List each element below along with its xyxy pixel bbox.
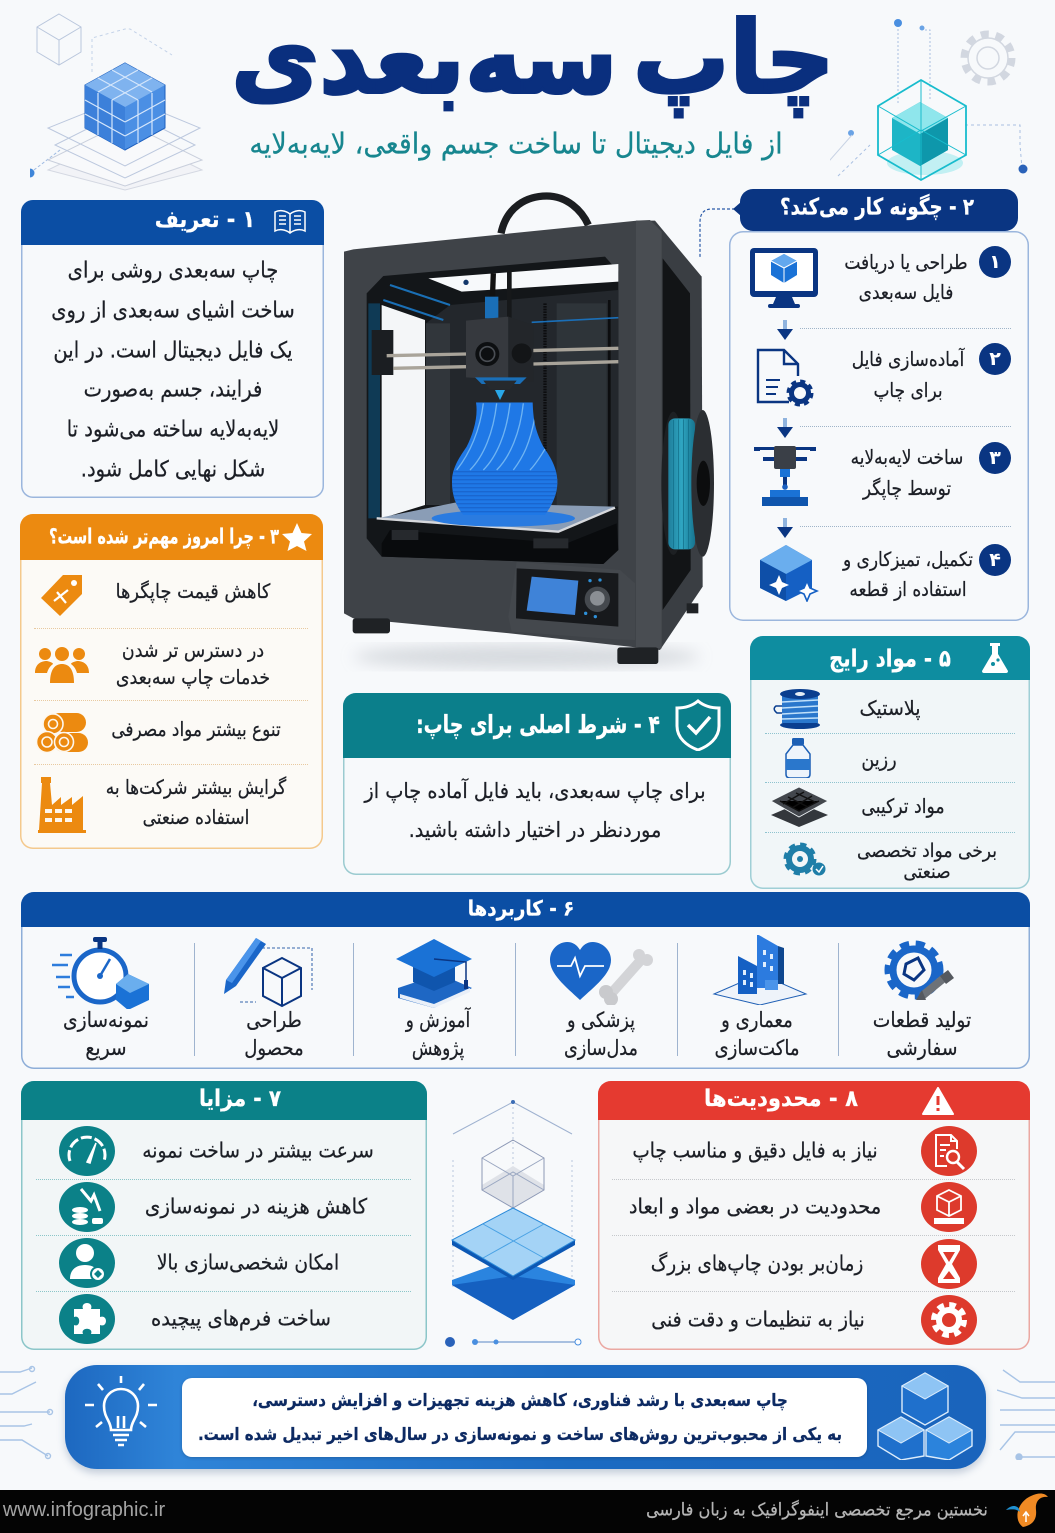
item: custom parts [873,1008,971,1060]
icon: size limit [921,1182,977,1232]
step 4 text [842,548,973,602]
panel 7: advantages [21,1081,427,1350]
heading: why: ۳ - چرا امروز مهم‌تر شده است؟ [49,524,279,548]
icon: gear and part [784,842,826,876]
panel 7 header [21,1081,427,1120]
divider [612,1291,1015,1292]
circuit lines: left [0,1364,56,1460]
3D printer illustration [344,192,714,672]
item 2: خدمات چاپ سه‌بعدی [116,666,270,689]
connector: dashed line to how it works [699,208,734,257]
step 4 text: استفاده از قطعه [849,578,967,601]
item 2: در دسترس تر شدن [122,639,264,662]
wire cube [37,14,81,65]
printed blue vase [450,400,560,517]
icon: star [282,523,312,551]
heading: how it works: ۲ - چگونه کار می‌کند؟ [780,194,974,220]
panel 5 header [750,636,1030,680]
item: specialty [857,840,997,883]
item: medicine: مدل‌سازی [564,1036,638,1060]
lower blue layer [452,1258,575,1320]
item: architecture [714,1008,800,1060]
icon: puzzle [59,1294,115,1344]
item 3: تنوع بیشتر مواد مصرفی [111,718,281,741]
heading: advantages: ۷ - مزایا [199,1086,281,1112]
condition text: موردنظر در اختیار داشته باشید. [409,818,661,842]
step 1 text: طراحی یا دریافت [844,251,968,274]
logo [1004,1491,1050,1529]
icon: architecture [712,935,808,1005]
conclusion text: به یکی از محبوب‌ترین روش‌های ساخت و نمونه‌سازی در سال‌های اخیر تبدیل شده است. [198,1425,842,1445]
divider [612,1235,1015,1236]
item 4 [106,776,286,829]
divider [765,782,1015,783]
panel 8: limitations [598,1081,1030,1350]
icon: warning [922,1087,954,1115]
step 1 text: فایل سه‌بعدی [859,281,953,304]
icon: shield [676,699,720,751]
icon: nozzle printing [754,446,816,506]
icon: book [274,210,306,234]
icon: hourglass [921,1239,977,1289]
item: specialty: صنعتی [903,861,951,883]
icon: pencil and cube [222,938,318,1010]
build plate [382,523,618,564]
bottom dots [445,1337,581,1347]
arrow 2 [777,418,793,438]
icon: personalization [59,1238,115,1288]
panel 1: definition [21,200,324,498]
item: medicine [564,1008,638,1060]
step 2 badge: ۲ [989,348,1001,370]
item 2 [116,639,270,689]
step 1 badge [979,246,1011,278]
step 3 text: ساخت لایه‌به‌لایه [851,446,963,469]
heading: definition: ۱ - تعریف [155,207,255,233]
icon: light bulb [83,1375,159,1453]
step 2 text [852,348,965,402]
item: medicine: پزشکی و [567,1008,635,1032]
item: complex forms: ساخت فرم‌های پیچیده [151,1306,331,1330]
definition text: لایه‌به‌لایه ساخته می‌شود تا [67,417,279,443]
conclusion banner [65,1365,986,1469]
divider [800,526,1011,527]
footer tagline: نخستین مرجع تخصصی اینفوگرافیک به زبان فارسی [646,1500,988,1520]
conclusion text [198,1384,842,1452]
item: product design: طراحی [246,1008,302,1032]
icon: cost reduction [59,1182,115,1232]
item: rapid prototyping: نمونه‌سازی [63,1008,149,1032]
gear [964,34,1012,82]
icon: composite layers [771,788,828,827]
item 4: استفاده صنعتی [143,806,249,829]
blue lattice cube [85,63,165,150]
icon: custom parts gear [884,940,954,1000]
icon: factory [38,777,86,833]
panel 5: common materials [750,636,1030,889]
icon: finished cube [760,545,819,602]
divider [36,1179,411,1180]
definition text: شکل نهایی کامل شود. [81,457,265,483]
item: rapid prototyping: سریع [85,1036,127,1060]
item 1: کاهش قیمت چاپگرها [116,580,270,603]
step 2 badge [979,343,1011,375]
item: resin: رزین [861,747,897,771]
item: product design [244,1006,304,1062]
panel 3 header [20,514,323,560]
icon: monitor [750,248,818,308]
heading: materials: ۵ - مواد رایج [829,645,951,673]
item 4: گرایش بیشتر شرکت‌ها به [106,776,286,799]
step 1 text [844,251,968,304]
item: accurate file: نیاز به فایل دقیق و مناسب چاپ [632,1138,878,1162]
divider [34,764,308,765]
definition text: فرایند، جسم به‌صورت [84,377,262,403]
item: composites: مواد ترکیبی [861,794,945,818]
wire cube [482,1140,544,1208]
title: چاپ سه‌بعدی [231,0,835,116]
step 2 text: آماده‌سازی فایل [852,348,964,371]
item: education: پژوهش [412,1036,464,1060]
conclusion text: چاپ سه‌بعدی با رشد فناوری، کاهش هزینه تجهیزات و افزایش دسترسی، [252,1391,788,1411]
item: materials limit: محدودیت در بعضی مواد و ابعاد [629,1194,881,1218]
conclusion text card [182,1378,867,1457]
extruder [466,270,533,400]
panel 2 header [740,189,1018,231]
definition text: ساخت اشیای سه‌بعدی از روی [51,297,295,323]
panel 6: applications [21,892,1030,1069]
heading: limitations: ۸ - محدودیت‌ها [704,1086,858,1112]
item: cost: کاهش هزینه در نمونه‌سازی [145,1194,367,1218]
panel 6 header [21,892,1030,927]
divider [34,628,308,629]
item: technical settings: نیاز به تنظیمات و دقت فنی [651,1307,865,1331]
teal cube [878,80,966,180]
panel 2 header notch [733,202,740,216]
step 3 badge: ۳ [989,447,1001,469]
icon: heart and bone [550,942,653,1005]
item: personalization: امکان شخصی‌سازی بالا [157,1250,339,1274]
item: rapid prototyping [63,1006,149,1062]
step 4 badge: ۴ [989,549,1001,571]
footer bar [0,1490,1055,1533]
icon: file inspection [921,1126,977,1176]
circuit lines: right [997,1364,1055,1460]
icon: stacked cubes [877,1372,973,1460]
heading: condition: ۴ - شرط اصلی برای چاپ: [416,710,660,739]
step 3 text [851,446,963,500]
column dividers [838,943,839,1056]
control panel [508,562,635,640]
panel 4: main condition [343,693,731,875]
item: education [404,1006,471,1060]
definition text: یک فایل دیجیتال است. در این [53,337,293,363]
condition text: برای چاپ سه‌بعدی، باید فایل آماده چاپ از [364,779,706,803]
divider [612,1179,1015,1180]
divider [800,328,1011,329]
icon: people [35,647,89,683]
icon: price tag [41,575,82,616]
icon: settings gear [921,1295,977,1345]
definition text: چاپ سه‌بعدی روشی برای [68,258,278,284]
divider [800,426,1011,427]
background decoration: top left [30,14,203,190]
upper blue layer [452,1208,575,1280]
panel 2: how it works [729,231,1029,621]
background decoration: top right [830,19,1028,181]
panel 8 header [598,1081,1030,1120]
condition text [363,778,706,842]
website url: www.infographic.ir [3,1499,165,1521]
icon: flask [982,643,1008,673]
divider [36,1291,411,1292]
heading: applications: ۶ - کاربردها [468,896,574,920]
arrow 1 [777,320,793,340]
step 4 badge [979,544,1011,576]
step 3 badge [979,442,1011,474]
icon: graduation cap and book [396,939,472,1008]
icon: speedometer [59,1126,115,1176]
step 2 text: برای چاپ [873,379,943,402]
filament cable [501,196,588,233]
icon: bottle [785,738,811,778]
definition text [51,258,295,483]
divider [34,700,308,701]
panel 1 header [21,200,324,245]
item: custom parts: سفارشی [886,1036,958,1060]
item: architecture: معماری و [721,1008,793,1032]
icon: material rolls [37,713,88,752]
step 1 badge: ۱ [989,251,1001,273]
arrow 3 [777,518,793,538]
printer frame [344,220,703,650]
center decoration: layer stack [443,1100,583,1350]
divider [765,733,1015,734]
divider [36,1235,411,1236]
step 3 text: توسط چاپگر [863,477,951,500]
item: product design: محصول [244,1036,304,1060]
item: plastic: پلاستیک [859,696,921,720]
subtitle: از فایل دیجیتال تا ساخت جسم واقعی، لایه‌به‌لایه [249,127,783,161]
icon: document and gear [756,348,814,406]
panel 3: why more important [20,514,323,849]
item: custom parts: تولید قطعات [873,1008,971,1032]
item: speed: سرعت بیشتر در ساخت نمونه [142,1138,374,1162]
item: architecture: ماکت‌سازی [714,1036,800,1060]
feet [353,603,698,664]
filament spool [661,410,714,557]
item: long time: زمان‌بر بودن چاپ‌های بزرگ [651,1251,863,1275]
item: education: آموزش و [406,1008,470,1032]
step 4 text: تکمیل، تمیزکاری و [843,548,973,571]
divider [765,832,1015,833]
item: specialty: برخی مواد تخصصی [857,840,997,862]
icon: stopwatch and cube [52,937,152,1009]
icon: spool [773,689,820,729]
panel 4 header [343,693,731,758]
